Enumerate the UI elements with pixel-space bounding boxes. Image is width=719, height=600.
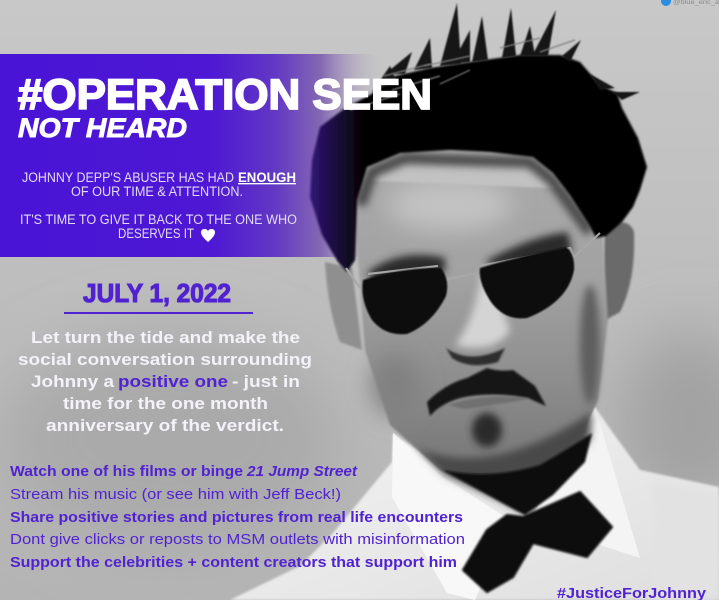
date: JULY 1, 2022 bbox=[83, 278, 231, 308]
banner line 3: IT'S TIME TO GIVE IT BACK TO THE ONE WHO bbox=[20, 212, 297, 227]
heading line 2: NOT HEARD bbox=[18, 113, 187, 143]
neck shadow bbox=[443, 433, 592, 515]
item 3: Share positive stories and pictures from real life encounters bbox=[10, 509, 463, 526]
hairline shadow bbox=[360, 158, 590, 232]
banner line 1: JOHNNY DEPP'S ABUSER HAS HAD bbox=[22, 170, 234, 185]
paragraph line 1: Let turn the tide and make the bbox=[31, 328, 300, 347]
title bbox=[18, 71, 432, 143]
goatee bbox=[472, 413, 502, 447]
face bbox=[352, 180, 608, 510]
item 1 film title: 21 Jump Street bbox=[246, 463, 358, 480]
action list bbox=[10, 463, 465, 571]
paragraph line 5: anniversary of the verdict. bbox=[46, 416, 284, 435]
white paragraph bbox=[18, 328, 312, 435]
eyebrow shadow bbox=[368, 232, 572, 282]
paragraph line 3 start: Johnny a bbox=[31, 372, 115, 391]
paragraph line 2: social conversation surrounding bbox=[18, 350, 312, 369]
banner line 4: DESERVES IT bbox=[118, 226, 194, 241]
sunglasses bbox=[346, 233, 600, 334]
moustache and lips bbox=[427, 368, 546, 416]
icon: heart bbox=[201, 229, 215, 242]
hair streaks bbox=[350, 38, 575, 110]
nose bbox=[446, 270, 510, 365]
paragraph line 4: time for the one month bbox=[63, 394, 268, 413]
twitter badge: @blue_eric_a bbox=[673, 0, 719, 6]
banner text bbox=[20, 170, 297, 242]
item 1: Watch one of his films or binge bbox=[10, 463, 243, 480]
emphasis: enough: ENOUGH bbox=[238, 170, 296, 185]
hair mass bbox=[310, 55, 647, 272]
ears bbox=[325, 222, 634, 350]
right cheek shadow bbox=[580, 285, 600, 405]
bow tie bbox=[463, 492, 612, 592]
stubble bbox=[418, 412, 592, 510]
shirt and collar bbox=[230, 407, 719, 600]
left cheek tone bbox=[371, 355, 419, 415]
heading line 1: #OPERATION SEEN bbox=[18, 71, 432, 119]
left lens bbox=[362, 268, 447, 334]
emphasis: positive one: positive one bbox=[118, 372, 228, 391]
purple banner bbox=[0, 54, 382, 257]
photo: man in sunglasses and bow tie bbox=[230, 3, 719, 600]
hair spikes bbox=[372, 3, 640, 100]
paragraph line 3 end: - just in bbox=[232, 372, 300, 391]
date underline bbox=[64, 312, 253, 314]
twitter badge bbox=[661, 0, 719, 6]
right lens bbox=[480, 247, 574, 318]
hair bbox=[310, 3, 647, 272]
item 2: Stream his music (or see him with Jeff Beck!) bbox=[10, 486, 341, 503]
banner line 2: OF OUR TIME & ATTENTION. bbox=[71, 184, 243, 199]
forehead highlight bbox=[388, 179, 512, 231]
item 4: Dont give clicks or reposts to MSM outlets with misinformation bbox=[10, 531, 465, 548]
item 5: Support the celebrities + content creators that support him bbox=[10, 554, 457, 571]
glasses frame bbox=[346, 233, 600, 288]
